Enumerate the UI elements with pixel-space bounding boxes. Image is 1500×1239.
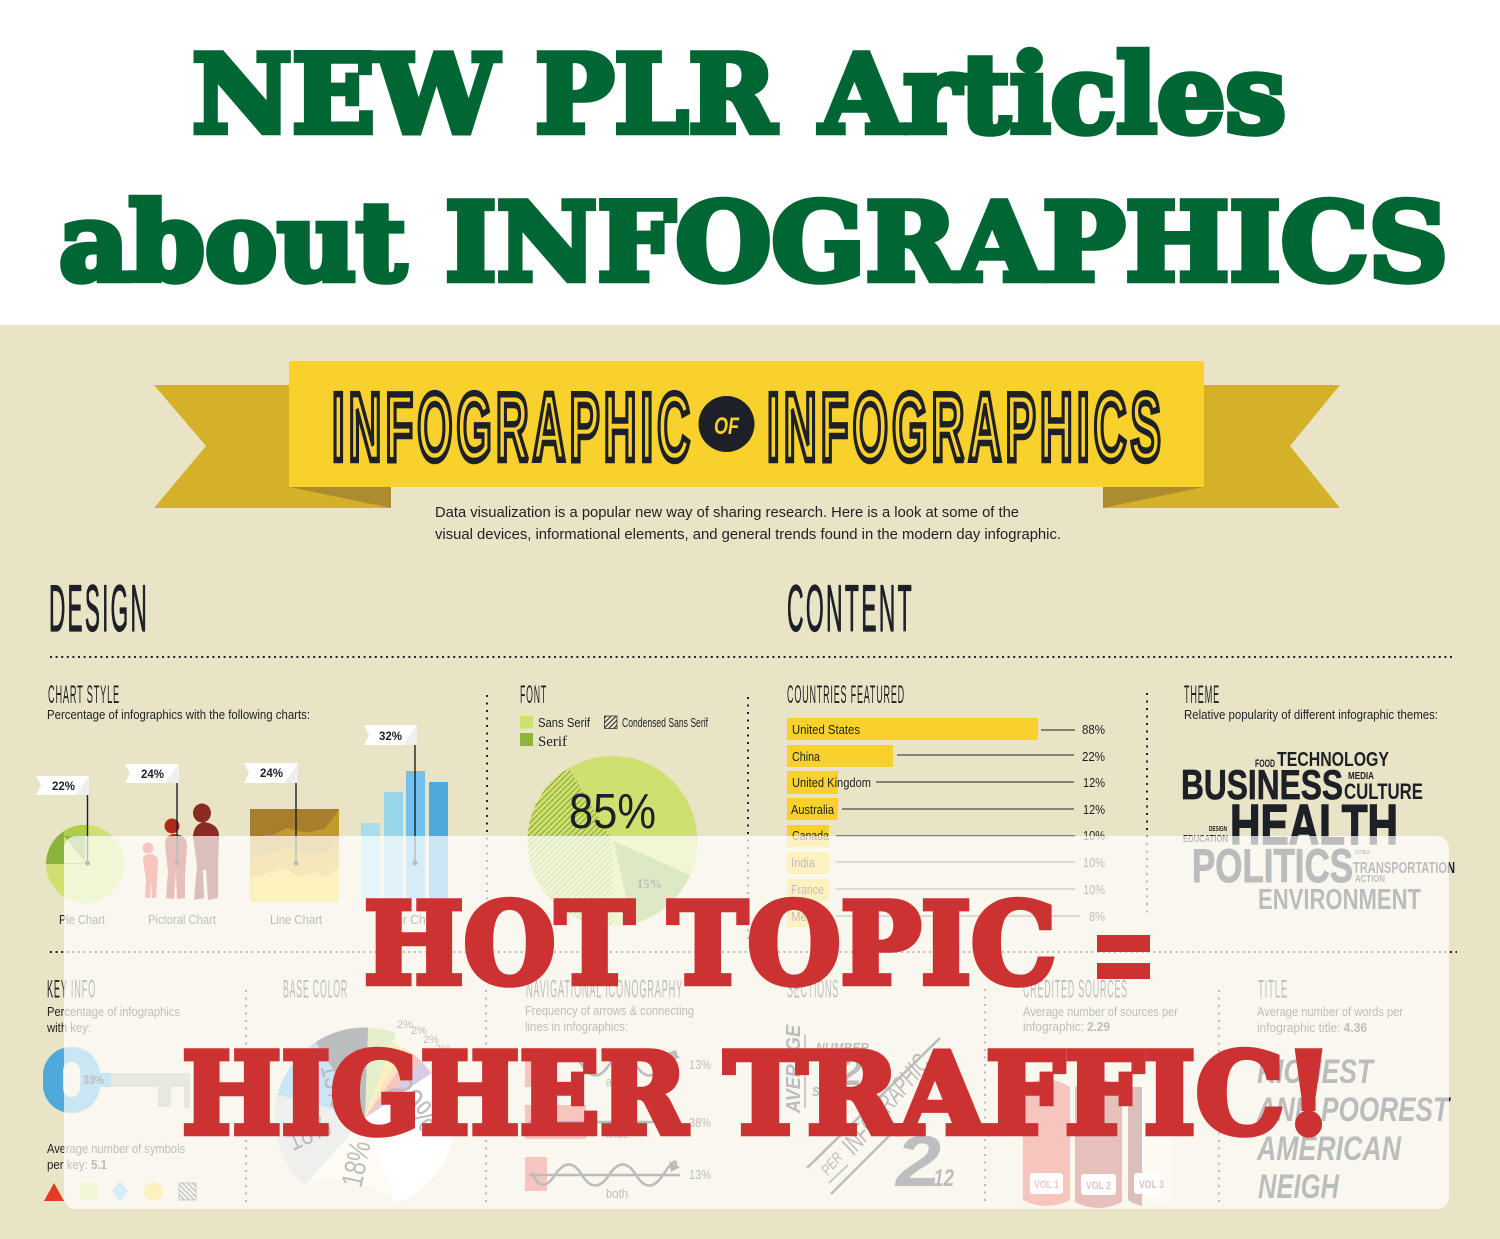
both row: 13% (689, 1168, 711, 1182)
country names: France (791, 882, 824, 897)
icon: books: VOL 2 (1086, 1180, 1111, 1192)
pie chart (46, 825, 124, 903)
country names (791, 722, 871, 924)
panel: theme (1181, 681, 1455, 916)
title example words (1256, 1053, 1451, 1206)
chart labels: Line Chart (270, 913, 322, 927)
country names: Mexico (791, 909, 827, 924)
country names: Canada (792, 828, 830, 843)
intro text (435, 505, 1061, 543)
chart labels: Bar Chart (388, 913, 441, 927)
flags: 22% (52, 779, 75, 793)
chart labels: Pictoral Chart (148, 913, 216, 927)
word cloud: ENVIRONMENT (1258, 884, 1421, 916)
panel: chart style: CHART STYLE (48, 681, 120, 709)
lines row (525, 1105, 711, 1141)
country percentages: 10% (1083, 828, 1105, 843)
word cloud: DESIGN (1209, 826, 1227, 833)
panel: key info: Percentage of infographics (47, 1005, 180, 1019)
country bars (787, 718, 1038, 927)
translucent overlay panel (64, 836, 1449, 1209)
sections typographic graphic: SECTIONS (812, 1084, 872, 1099)
country percentages: 8% (1089, 909, 1105, 924)
word cloud: ACTION (1355, 874, 1385, 885)
both row (525, 1157, 711, 1201)
panel: countries featured (787, 681, 1105, 927)
title example words: AND POOREST (1256, 1091, 1451, 1129)
intro text: visual devices, informational elements, and general trends found in the modern day infographic. (435, 527, 1061, 543)
banner title: INFOGRAPHIC (332, 375, 694, 481)
icon: key: 33% (83, 1073, 104, 1087)
panel: countries featured: COUNTRIES FEATURED (787, 681, 905, 709)
panel: credited sources: infographic: 2.29 (1023, 1020, 1110, 1034)
font pie chart: 15% (637, 876, 662, 891)
panel: key info (43, 976, 196, 1202)
panel: theme: Relative popularity of different infographic themes: (1184, 708, 1438, 722)
intro text: Data visualization is a popular new way of sharing research. Here is a look at some of the (435, 505, 1019, 521)
sections typographic graphic: NUMBER (816, 1040, 870, 1055)
sections typographic graphic (783, 1024, 954, 1202)
lines row: lines (606, 1127, 628, 1141)
icon: books: VOL 1 (1034, 1179, 1059, 1191)
sections typographic graphic: AVERAGE (783, 1024, 805, 1114)
panel: navigational iconography: lines in infographics: (525, 1020, 628, 1034)
callout: hot topic higher traffic (182, 880, 1333, 1160)
flags (36, 725, 418, 866)
banner title: OF (714, 413, 740, 440)
base color pie chart: 2% (435, 1043, 451, 1055)
panel: credited sources (1023, 976, 1178, 1208)
panel: title (1256, 976, 1451, 1206)
headline: new plr articles about infographics: about (59, 180, 406, 306)
chart labels (59, 913, 441, 927)
key symbols (44, 1181, 196, 1202)
base color pie chart: 18% (282, 1109, 336, 1158)
font legend: Serif (538, 734, 567, 750)
sections typographic graphic: INFOGRAPHIC (836, 1048, 936, 1160)
background panel (0, 325, 1500, 1239)
word cloud: CULTURE (1344, 779, 1423, 804)
base color pie chart: 2% (411, 1025, 427, 1037)
callout: hot topic higher traffic: TRAFFIC! (724, 1030, 1333, 1160)
country names: Australia (791, 802, 835, 817)
icon: books: VOL 3 (1139, 1179, 1164, 1191)
panel: chart style (36, 681, 448, 927)
font legend: Sans Serif (538, 715, 590, 730)
word cloud: CITIES (1355, 850, 1371, 856)
country percentages: 12% (1083, 802, 1105, 817)
country names: United Kingdom (792, 775, 871, 790)
font pie chart (528, 756, 698, 926)
panel: base color: BASE COLOR (283, 976, 348, 1004)
panel: font: FONT (520, 681, 547, 709)
banner ribbon (154, 361, 1340, 508)
arrows row: 13% (689, 1058, 711, 1072)
panel: navigational iconography (525, 976, 711, 1201)
country names: China (792, 749, 821, 764)
country names: India (791, 855, 816, 870)
callout: hot topic higher traffic: TOPIC (668, 880, 1056, 1010)
lines row: 38% (689, 1116, 711, 1130)
base color pie chart: 2% (397, 1019, 413, 1031)
country percentages: 88% (1082, 722, 1105, 737)
title example words: AMERICAN (1256, 1130, 1402, 1168)
callout: hot topic higher traffic: HOT (364, 880, 634, 1010)
arrows row (525, 1048, 711, 1089)
sections typographic graphic: 2 (894, 1122, 941, 1202)
panel: title: TITLE (1258, 976, 1288, 1004)
panel: key info: with key: (46, 1021, 91, 1035)
word cloud: EDUCATION (1183, 833, 1228, 845)
text: CONTENT (787, 571, 914, 645)
base color pie chart: 2% (423, 1034, 439, 1046)
callout: hot topic higher traffic: HIGHER (182, 1030, 688, 1160)
country names: United States (792, 722, 860, 737)
pictorial chart (142, 804, 219, 900)
text: NAVIGATIONAL ICONOGRAPHY (526, 976, 683, 1004)
country percentages: 12% (1083, 775, 1105, 790)
panel: key info: KEY INFO (47, 976, 96, 1004)
panel: credited sources: CREDITED SOURCES (1023, 976, 1128, 1004)
flags: 24% (141, 767, 164, 781)
headline: new plr articles about infographics: Articles (819, 32, 1286, 158)
headline: new plr articles about infographics: INFOGRAPHICS (445, 180, 1448, 306)
bar chart (361, 771, 448, 898)
country leader lines (836, 730, 1080, 916)
country percentages: 22% (1082, 749, 1105, 764)
word cloud: MEDIA (1348, 771, 1374, 782)
word cloud: TECHNOLOGY (1277, 749, 1390, 771)
base color pie chart: 29% (380, 1069, 449, 1139)
base color pie chart: 13% (314, 1060, 357, 1111)
word cloud (1181, 749, 1455, 916)
panel: font (520, 681, 708, 926)
both row: both (606, 1187, 628, 1201)
font legend (520, 715, 708, 750)
chart labels: Pie Chart (59, 913, 105, 927)
title example words: NEIGH (1258, 1168, 1340, 1206)
headline: new plr articles about infographics: NEW (192, 32, 500, 158)
arrows row: arrows (606, 1075, 636, 1089)
word cloud: FOOD (1255, 758, 1275, 770)
headline: new plr articles about infographics: PLR (535, 32, 777, 158)
flags: 24% (260, 766, 283, 780)
panel: title: infographic title: 4.36 (1257, 1021, 1367, 1035)
panel: sections: SECTIONS (787, 976, 839, 1004)
word cloud: POLITICS (1192, 839, 1353, 892)
font legend: Condensed Sans Serif (622, 715, 708, 730)
word cloud: BUSINESS (1181, 761, 1343, 808)
panel: sections (783, 976, 954, 1202)
panel: key info: Average number of symbols (47, 1142, 185, 1156)
sections typographic graphic: PER (818, 1149, 847, 1179)
title example words: RICHEST (1257, 1053, 1376, 1091)
panel: chart style: Percentage of infographics with the following charts: (47, 708, 310, 722)
country percentages: 10% (1083, 882, 1105, 897)
panel: navigational iconography: Frequency of arrows & connecting (525, 1004, 694, 1018)
panel: key info: per key: 5.1 (47, 1158, 107, 1172)
base color pie chart: 18% (336, 1138, 378, 1190)
base color pie chart (275, 1019, 455, 1203)
panel: theme: THEME (1184, 681, 1220, 709)
sections typographic graphic: .12 (928, 1165, 954, 1192)
font pie chart: 85% (569, 785, 656, 839)
icon: books (1023, 1080, 1173, 1208)
panel: title: Average number of words per (1257, 1005, 1403, 1019)
word cloud: HEALTH (1230, 793, 1398, 857)
text: DESIGN (49, 571, 149, 645)
country percentages (1082, 722, 1105, 924)
word cloud: TRANSPORTATION (1353, 860, 1455, 877)
headline: new plr articles about infographics (59, 32, 1448, 306)
icon: key (43, 1047, 190, 1113)
sections typographic graphic: 2 (839, 1050, 862, 1094)
flags: 32% (379, 729, 402, 743)
panel: credited sources: Average number of sources per (1023, 1005, 1178, 1019)
line chart (250, 809, 339, 902)
country percentages: 10% (1083, 855, 1105, 870)
panel: base color (275, 976, 455, 1203)
